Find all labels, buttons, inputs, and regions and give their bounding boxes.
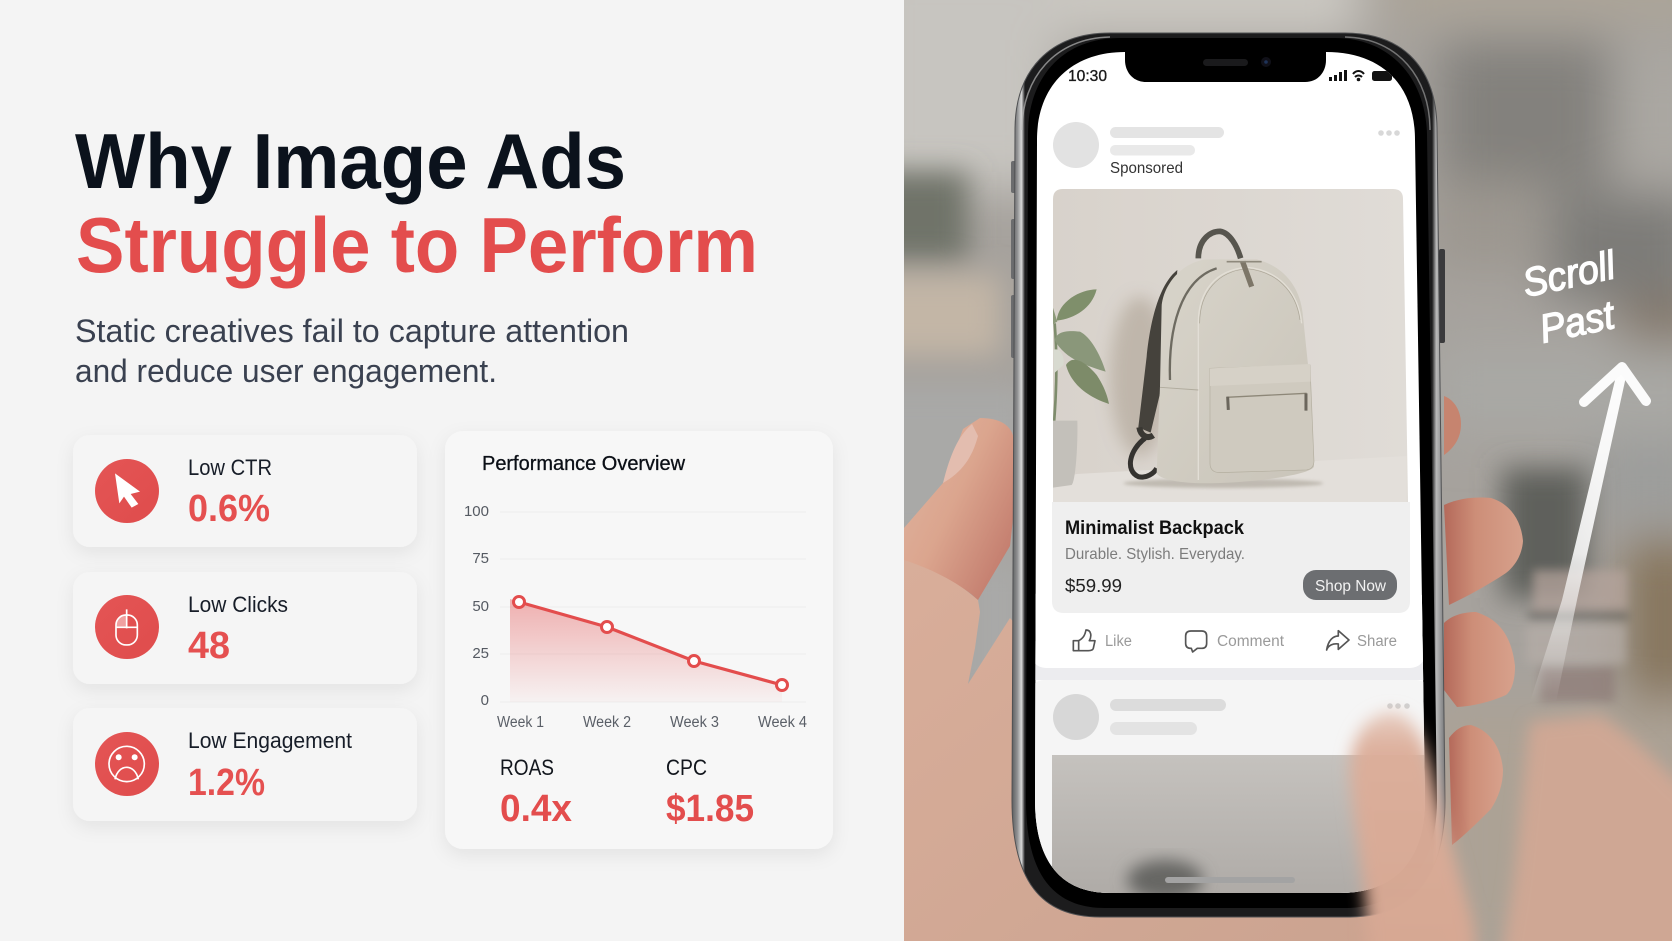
handwritten label: scroll past: Past [1536,293,1620,352]
metric: ROAS: 0.4x [500,788,572,830]
status time: 10:30 [1068,68,1107,85]
product info panel [1052,502,1410,613]
chart area fill [510,599,782,702]
text: low clicks: 48 [188,625,230,667]
y axis labels: 50 [472,598,489,615]
handle [1198,231,1241,258]
y axis labels [464,503,489,709]
foreground blurred swiping finger [1350,712,1672,941]
icon: sad face [95,732,159,796]
text: low CTR [188,455,272,530]
plant [1053,289,1109,488]
blurred room background [860,0,1672,941]
text: low engagement [188,728,352,804]
y axis labels: 75 [472,550,489,567]
thumbnail [943,424,978,483]
icon: share [1327,631,1349,650]
x axis labels: Week 1 [497,714,544,731]
blurred background smear near arrow [1526,570,1628,702]
button: shop now [1303,570,1397,600]
arrow: scroll direction [1530,367,1646,702]
status icons [1329,70,1394,81]
phone side buttons [1011,161,1445,358]
phone screen [1030,45,1430,900]
product info panel: $59.99 [1065,575,1122,596]
x axis labels [497,714,807,731]
text: low CTR: Low CTR [188,455,272,480]
left panel background [0,0,904,941]
heading: performance overview: Performance Overview [482,453,686,475]
action row: Like [1105,633,1132,650]
y axis labels: 0 [481,692,489,709]
icon: comment [1186,631,1207,652]
post header [1053,122,1400,177]
metric: CPC: CPC [666,755,707,780]
x axis labels: Week 3 [670,714,719,731]
icon: mouse [95,595,159,659]
subtitle [75,313,629,389]
text: low clicks [188,592,288,667]
white post card base [1030,590,1426,668]
chart markers [514,596,788,690]
bag body [1157,259,1314,483]
x axis labels: Week 4 [758,714,807,731]
panel: low engagement card [73,708,417,821]
finger 1 [1444,396,1461,455]
finger 2 [1444,498,1523,605]
metric: CPC: $1.85 [666,788,754,830]
metric: ROAS: ROAS [500,755,554,780]
finger 3 [1444,612,1515,707]
line chart [510,596,788,702]
action row: Share [1357,633,1397,650]
photo panel: hand holding phone [860,0,1672,941]
pot [1053,421,1077,488]
text: low engagement: 1.2% [188,762,265,804]
subtitle: Static creatives fail to capture attention [75,313,629,349]
handwritten label: scroll past [1524,248,1615,344]
next post placeholder [1030,620,1430,900]
chart line [519,602,782,685]
ad image: backpack [1050,186,1412,504]
action row: Comment [1217,633,1285,650]
sponsored label: Sponsored [1110,160,1183,177]
icon: like [1073,630,1095,651]
hand: palm and lower finger [904,560,1374,941]
metric: ROAS [500,755,572,830]
text: low CTR: 0.6% [188,488,270,530]
title [75,117,758,289]
front pocket [1210,365,1314,473]
text: low clicks: Low Clicks [188,592,288,617]
product info panel: Durable. Stylish. Everyday. [1065,546,1245,563]
action row [1073,630,1397,652]
icon: cursor [95,459,159,523]
title: Struggle to Perform [76,201,758,289]
home indicator [1165,877,1295,883]
button: shop now: Shop Now [1315,578,1387,595]
panel: low clicks card [73,572,417,684]
phone frame [1012,33,1445,917]
notch [1125,52,1326,82]
finger 4 [1449,725,1503,845]
hand: right fingers [1444,396,1523,845]
y axis labels: 100 [464,503,489,520]
handwritten label: scroll past: Scroll [1519,243,1620,306]
panel: performance overview [445,431,833,849]
y axis labels: 25 [472,645,489,662]
text: low engagement: Low Engagement [188,728,352,753]
hand: thumb [904,418,1014,600]
strap [1138,270,1177,433]
title: Why Image Ads [75,117,626,205]
metric: CPC [666,755,754,830]
subtitle: and reduce user engagement. [75,353,497,389]
panel: low CTR card [73,435,417,547]
table [1053,470,1260,502]
x axis labels: Week 2 [583,714,631,731]
product info panel: Minimalist Backpack [1065,517,1244,539]
